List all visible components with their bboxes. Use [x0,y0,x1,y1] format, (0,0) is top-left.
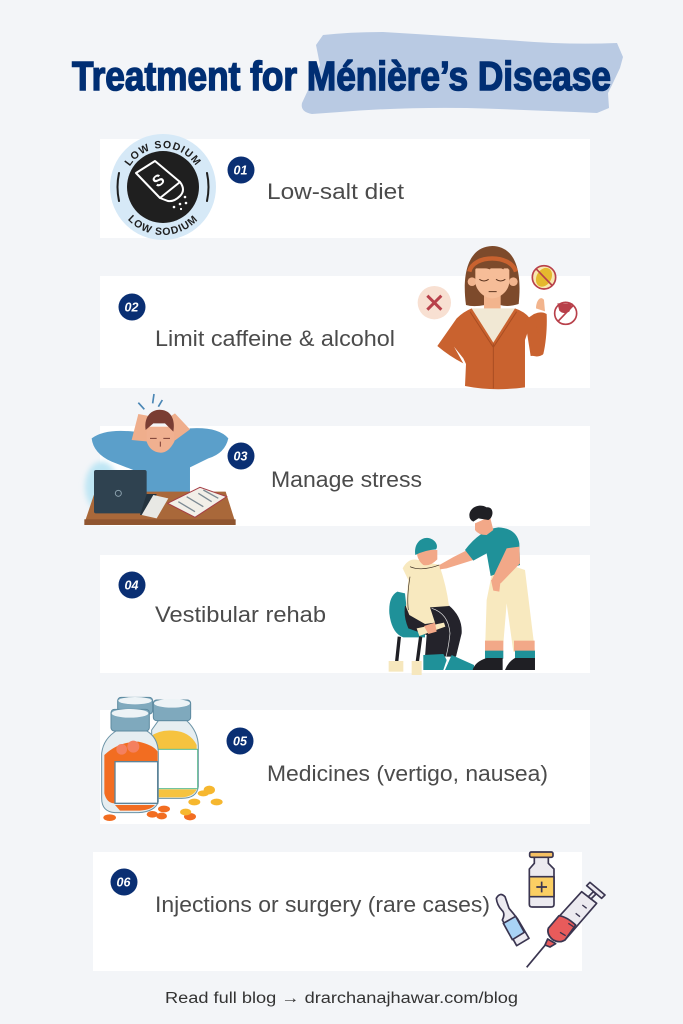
icon: woman refusing caffeine and alcohol [418,246,577,389]
icon: pill bottles [102,697,223,821]
panel: low-salt diet [100,134,590,240]
panel: limit caffeine and alcohol [100,246,590,389]
badge 06 [110,868,138,896]
icon: low sodium badge: S [149,171,169,191]
icon: low sodium badge: LOW SODIUM [128,214,198,235]
label: Injections or surgery (rare cases) [155,892,490,917]
badge 05 [226,728,254,754]
label: Medicines (vertigo, nausea) [267,761,548,786]
badge 03: 03 [234,450,247,464]
badge 05: 05 [233,734,248,748]
badge 04: 04 [125,578,138,592]
label: Vestibular rehab [155,602,326,627]
badge 02: 02 [125,300,138,314]
icon: vial, ampoule and syringe [496,852,605,967]
badge 01 [228,156,254,184]
badge 04 [118,572,146,598]
panel: injections or surgery [93,852,605,971]
badge 01: 01 [234,164,247,178]
icon: helper with seated patient [389,506,535,675]
label: Limit caffeine & alcohol [155,326,395,351]
title [72,32,623,114]
badge 03 [228,442,254,470]
icon: low sodium badge [110,134,216,240]
label: Low-salt diet [267,179,404,204]
panel: medicines [100,697,590,824]
title: Treatment for Ménière’s Disease [72,53,611,99]
icon: stressed man at desk [84,394,236,525]
badge 06: 06 [117,876,131,890]
badge 02 [118,294,146,320]
panel: manage stress [84,394,590,526]
footer link: Read full blog → drarchanajhawar.com/blog [165,990,518,1007]
label: Manage stress [271,467,422,492]
panel: vestibular rehab [100,506,590,675]
icon: low sodium badge: LOW SODIUM [124,140,201,166]
